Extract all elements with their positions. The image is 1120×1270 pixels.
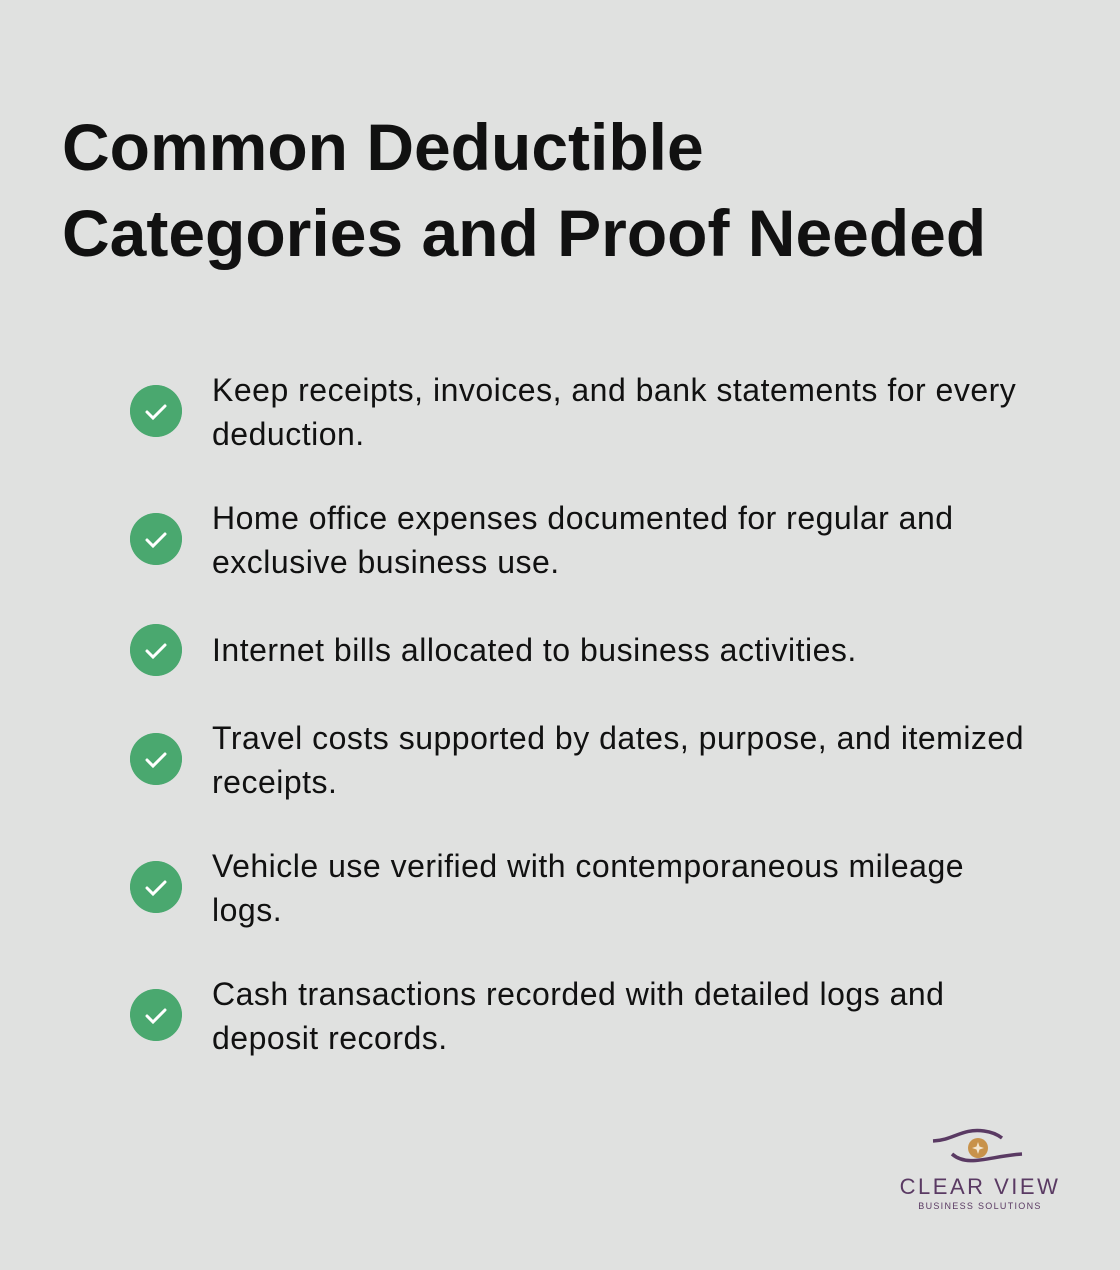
title: Common Deductible: [62, 110, 704, 184]
text: Keep receipts, invoices, and bank statements for every: [212, 372, 1016, 408]
text: deposit records.: [212, 1020, 448, 1056]
icon: check: [130, 861, 182, 913]
icon: check: [130, 624, 182, 676]
text: [212, 848, 964, 928]
text: receipts.: [212, 764, 337, 800]
item 5: [130, 848, 964, 928]
text: Travel costs supported by dates, purpose, and itemized: [212, 720, 1024, 756]
text: [212, 720, 1024, 800]
text: Vehicle use verified with contemporaneous mileage: [212, 848, 964, 884]
text: exclusive business use.: [212, 544, 560, 580]
logo: BUSINESS SOLUTIONS: [918, 1201, 1042, 1211]
item 6: [130, 976, 944, 1056]
logo text: CLEAR VIEW: [900, 1174, 1060, 1199]
item 2: [130, 500, 954, 580]
text: Cash transactions recorded with detailed logs and: [212, 976, 944, 1012]
item 4: [130, 720, 1024, 800]
icon: check: [130, 385, 182, 437]
item 1: [130, 372, 1016, 452]
title: [62, 110, 986, 270]
text: [212, 976, 944, 1056]
icon: check: [130, 733, 182, 785]
item 3: [130, 624, 857, 676]
text: deduction.: [212, 416, 365, 452]
icon: check: [130, 513, 182, 565]
text: Internet bills allocated to business activities.: [212, 632, 857, 668]
icon: check: [130, 989, 182, 1041]
logo icon: eye: [932, 1128, 1022, 1162]
text: logs.: [212, 892, 282, 928]
text: Home office expenses documented for regular and: [212, 500, 954, 536]
text: [212, 372, 1016, 452]
title: Categories and Proof Needed: [62, 196, 986, 270]
logo: [900, 1128, 1060, 1211]
text: [212, 500, 954, 580]
